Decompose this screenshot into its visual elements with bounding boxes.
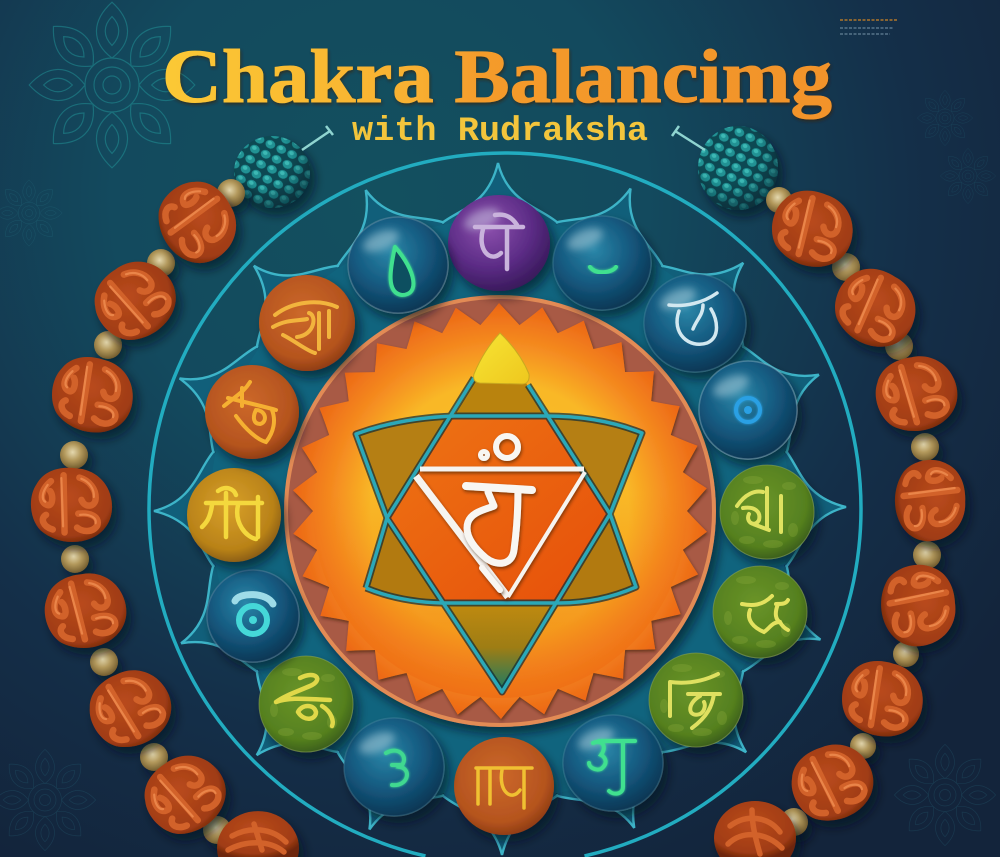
star of two triangles bbox=[356, 333, 642, 692]
stone: blue right upper bbox=[699, 361, 797, 459]
left rudraksha bead strand bbox=[28, 126, 333, 857]
rudraksha beads left bbox=[28, 169, 250, 848]
ring of chakra stones bbox=[187, 195, 814, 835]
stone: blue bottom right bbox=[563, 715, 663, 811]
strand end: teal bead right bbox=[698, 126, 778, 210]
string left bbox=[302, 126, 333, 150]
right rudraksha bead strand bbox=[672, 126, 965, 857]
stone: green lower left 2 bbox=[259, 656, 353, 752]
gold spacer beads left bbox=[60, 179, 245, 844]
central chakra medallion bbox=[286, 297, 714, 725]
stone: blue upper right 1 bbox=[553, 216, 651, 310]
faint mandala bottom left bbox=[0, 749, 96, 851]
star outline bbox=[356, 378, 642, 692]
stone: orange bottom bbox=[454, 737, 554, 835]
stone: blue upper left bbox=[348, 217, 448, 313]
strand end: teal bead left bbox=[234, 136, 310, 208]
string right bbox=[672, 126, 705, 150]
star fills bbox=[356, 340, 642, 692]
yellow apex bbox=[474, 333, 529, 384]
central seed symbol bbox=[466, 436, 532, 590]
stone: green lower right 1 bbox=[713, 566, 807, 658]
stone: green right bbox=[720, 465, 814, 559]
stone: blue bottom left bbox=[344, 718, 444, 816]
subtitle: with Rudraksha bbox=[352, 113, 648, 151]
title: Chakra Balancimg bbox=[162, 35, 832, 119]
stone: orange left upper bbox=[205, 365, 299, 459]
rudraksha beads right bbox=[762, 180, 965, 831]
faint mandala left bbox=[0, 180, 62, 246]
stone: orange upper left bbox=[259, 275, 355, 371]
stone: blue upper right 2 bbox=[644, 274, 746, 372]
stone: amber left bbox=[187, 468, 281, 562]
copper disc bbox=[286, 297, 714, 725]
faint mandala bottom right bbox=[894, 744, 996, 846]
stone: green lower right 2 bbox=[649, 653, 743, 747]
decorative mandala top left bbox=[29, 2, 195, 168]
outer teal ring bbox=[149, 153, 861, 856]
cropped bead at bottom edge left bbox=[217, 811, 299, 857]
gold spacer beads right bbox=[766, 187, 941, 836]
stone: blue lower left bbox=[207, 570, 299, 662]
faint mandala top right bbox=[917, 90, 973, 146]
stone: purple top bbox=[448, 195, 550, 291]
inner white triangle bbox=[416, 469, 585, 597]
orange flower burst bbox=[291, 302, 709, 720]
illegible fine print top right bbox=[840, 20, 897, 34]
lotus petal field bbox=[154, 163, 846, 855]
cropped bead at bottom edge right bbox=[714, 801, 796, 857]
faint mandala right bbox=[940, 148, 996, 204]
